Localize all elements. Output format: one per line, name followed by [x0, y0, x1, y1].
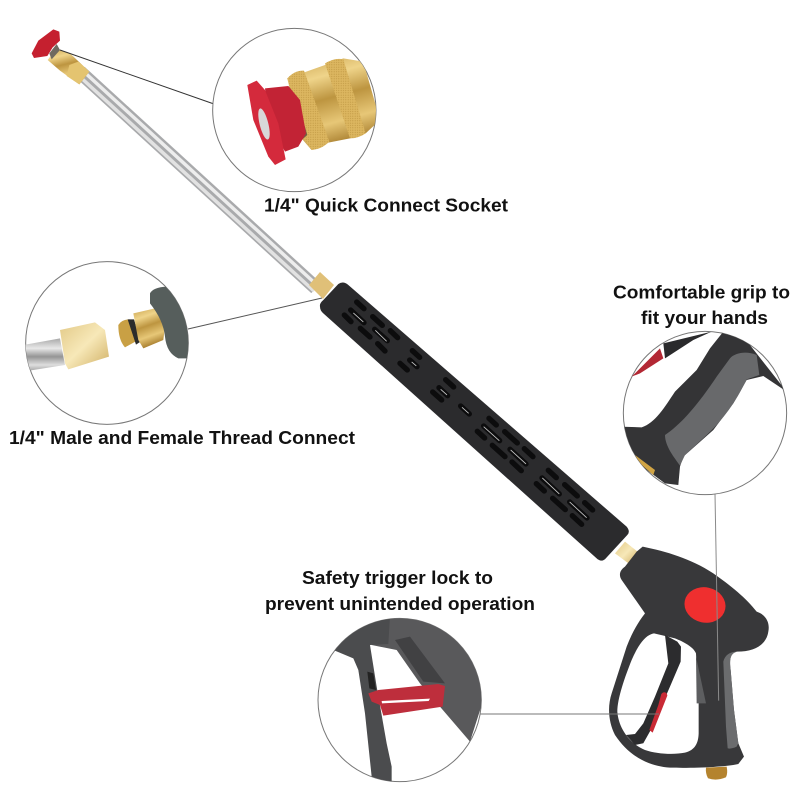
label: comfortable grip: Comfortable grip to: [613, 282, 790, 302]
circle detail: safety trigger lock: [318, 617, 483, 783]
outlet fitting: [706, 767, 727, 780]
label: safety trigger lock: Safety trigger lock to: [302, 568, 493, 588]
pressure gun: [609, 493, 769, 780]
lance tube: [78, 70, 318, 291]
label: comfortable grip: fit your hands: [641, 308, 768, 328]
circle detail: thread connect: [23, 262, 190, 424]
leader line: trigger lock: [480, 713, 659, 715]
brass coupling: [615, 542, 638, 564]
circle detail: quick connect socket: [213, 28, 380, 192]
red trigger lock: [649, 692, 667, 733]
label: comfortable grip: [613, 282, 790, 328]
grey grip strip: [723, 652, 738, 749]
label: safety trigger lock: prevent unintended operation: [265, 594, 535, 614]
leader line: thread connect: [188, 298, 322, 329]
label: quick connect socket: 1/4" Quick Connect Socket: [264, 196, 508, 216]
red button: [681, 583, 729, 627]
grip sleeve: [320, 283, 629, 561]
leader line: grip: [715, 493, 719, 701]
nozzle tip with quick connect: [32, 29, 89, 84]
leader line: quick connect: [60, 50, 214, 104]
trigger lever: [626, 635, 681, 745]
label: thread connect: 1/4" Male and Female Thread Connect: [9, 428, 355, 448]
label: safety trigger lock: [265, 568, 535, 614]
gun body: [609, 547, 769, 768]
circle detail: comfortable grip: [620, 331, 787, 495]
brass fitting at sleeve: [309, 272, 334, 299]
